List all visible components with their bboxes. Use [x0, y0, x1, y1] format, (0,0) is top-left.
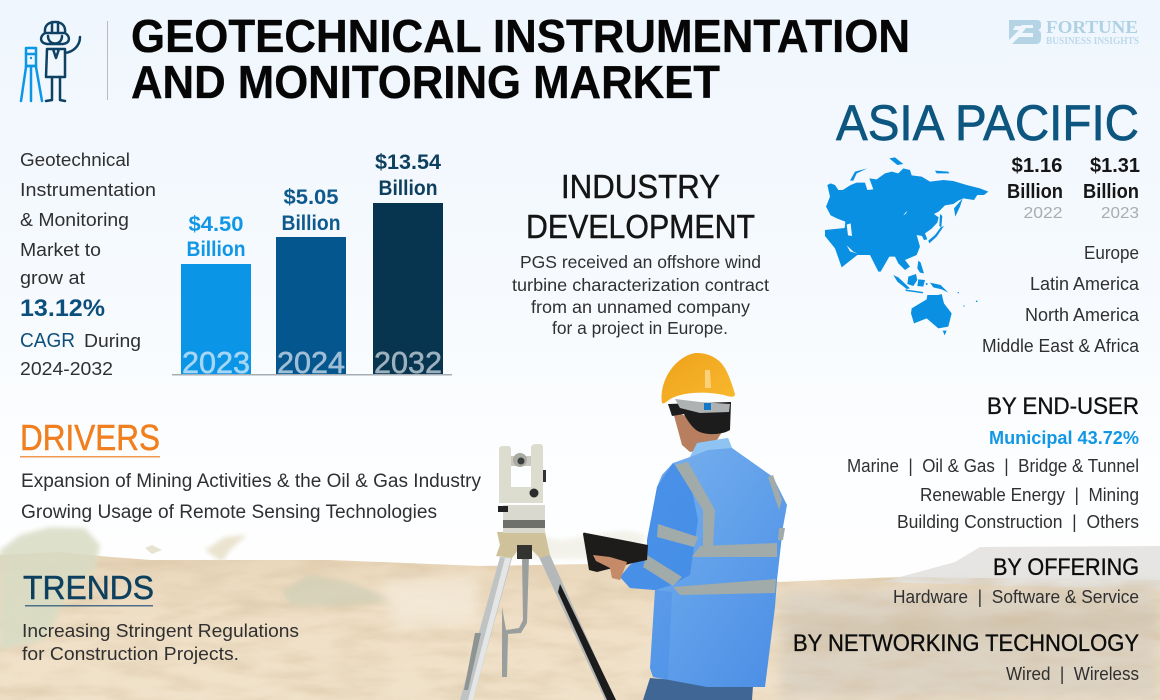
trousers: [643, 678, 753, 700]
CAGR text block: During: [84, 331, 141, 351]
CAGR text block: 13.12%: [20, 295, 105, 322]
stats: Asia Pacific values: 2023: [1101, 205, 1139, 222]
heading: industry development: DEVELOPMENT: [526, 208, 755, 245]
hair: [668, 402, 731, 434]
reflective stripes: [643, 462, 785, 595]
segment: by end-user: BY END-USER: [987, 393, 1139, 420]
neck and ear: [673, 412, 722, 452]
segment: by offering: [893, 554, 1139, 607]
segment: by end-user: Municipal 43.72%: [989, 428, 1139, 448]
stats: Asia Pacific values: $1.16: [1012, 155, 1062, 177]
logo: Fortune Business Insights: [1009, 17, 1139, 47]
panel: trends: TRENDS: [23, 569, 154, 606]
CAGR text block: & Monitoring: [20, 210, 129, 230]
background quarry landscape: [0, 527, 1160, 700]
jacket: [620, 438, 787, 687]
list: other regions: Latin America: [1030, 274, 1140, 294]
title: [131, 10, 910, 108]
text: industry development description: from an unnamed company: [531, 297, 750, 317]
text: industry development description: PGS received an offshore wind: [520, 252, 761, 272]
stats: Asia Pacific values: 2022: [1024, 205, 1063, 222]
jacket lower shading: [650, 590, 672, 680]
bar chart: 2024: [277, 345, 345, 380]
bar chart: Billion: [186, 238, 246, 261]
hat band: [675, 399, 730, 413]
panel: drivers: [20, 417, 481, 523]
segment: by offering: Hardware | Software & Service: [893, 587, 1139, 607]
segment: by networking technology: [793, 630, 1139, 684]
map: Asia Pacific: [825, 157, 988, 335]
bar chart: Billion: [378, 177, 438, 200]
CAGR text block: [20, 150, 156, 379]
segment: by end-user: Marine | Oil & Gas | Bridge & Tunnel: [847, 456, 1139, 476]
panel: drivers: DRIVERS: [20, 417, 160, 458]
bar chart: $13.54: [375, 151, 441, 174]
bar chart: 2023: [182, 345, 250, 380]
heading: industry development: INDUSTRY: [561, 168, 720, 205]
CAGR text block: 2024-2032: [20, 359, 113, 379]
CAGR text block: grow at: [20, 268, 85, 288]
CAGR text block: Geotechnical: [20, 150, 130, 170]
stats: Asia Pacific values: $1.31: [1090, 155, 1140, 177]
photo: engineer with tablet: [583, 353, 787, 700]
stats: Asia Pacific values: Billion: [1007, 181, 1063, 203]
title: GEOTECHNICAL INSTRUMENTATION: [131, 10, 910, 62]
segment: by end-user: Building Construction | Others: [897, 512, 1139, 532]
bar chart: $5.05: [284, 186, 339, 209]
text: industry development description: for a project in Europe.: [552, 318, 728, 338]
CAGR text block: Market to: [20, 240, 101, 260]
list: other regions: North America: [1025, 305, 1140, 325]
header divider: [107, 21, 108, 100]
panel: trends: Increasing Stringent Regulations: [22, 621, 299, 641]
title: AND MONITORING MARKET: [131, 56, 720, 108]
heading: industry development: [526, 168, 755, 245]
segment: by offering: BY OFFERING: [993, 554, 1139, 581]
heading: Asia Pacific: ASIA PACIFIC: [836, 95, 1139, 151]
panel: drivers: Growing Usage of Remote Sensing Technologies: [21, 502, 437, 523]
bar chart: $4.50: [188, 213, 244, 236]
collar: [690, 438, 732, 457]
CAGR text block: CAGR: [20, 330, 75, 352]
hand: [593, 555, 627, 580]
photo: theodolite on tripod: [460, 444, 616, 700]
text: industry development description: turbine characterization contract: [512, 275, 769, 295]
list: other regions: Middle East & Africa: [982, 336, 1140, 356]
panel: trends: [22, 569, 299, 664]
stats: Asia Pacific values: Billion: [1083, 181, 1139, 203]
panel: drivers: Expansion of Mining Activities & the Oil & Gas Industry: [21, 471, 481, 492]
text: industry development description: [512, 252, 769, 338]
tablet: [583, 533, 648, 572]
logo: Fortune Business Insights: BUSINESS INSIGHTS: [1046, 36, 1139, 47]
hard hat: [661, 353, 735, 403]
segment: by networking technology: BY NETWORKING TECHNOLOGY: [793, 630, 1139, 657]
segment: by networking technology: Wired | Wireless: [1006, 664, 1139, 684]
bar chart: 2032: [374, 345, 442, 380]
sleeve shading: [620, 463, 698, 590]
bar chart: Billion: [282, 212, 340, 235]
panel: trends: for Construction Projects.: [22, 644, 239, 664]
CAGR text block: Instrumentation: [20, 180, 156, 200]
list: other regions: [982, 243, 1140, 356]
segment: by end-user: Renewable Energy | Mining: [920, 485, 1139, 505]
icon: surveyor with tripod: [21, 22, 80, 101]
stats: Asia Pacific values: [1007, 155, 1140, 222]
list: other regions: Europe: [1084, 243, 1139, 263]
logo: Fortune Business Insights: FORTUNE: [1046, 17, 1138, 37]
bar chart: [172, 151, 452, 380]
segment: by end-user: [847, 393, 1139, 532]
